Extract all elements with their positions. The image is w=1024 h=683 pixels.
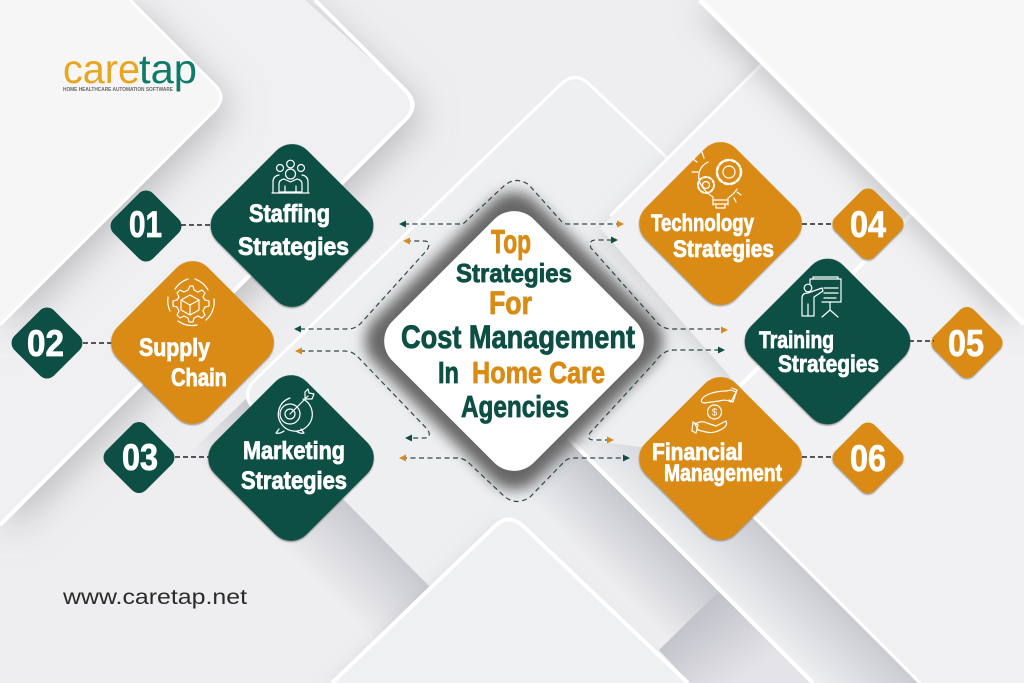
item 05: training strategies xyxy=(736,250,1007,433)
diamond shadow ring xyxy=(353,180,675,502)
number badge 04: 04 xyxy=(850,204,886,245)
number badge 03: 03 xyxy=(122,437,158,478)
item 03: marketing strategies xyxy=(99,366,383,550)
number badge 05 xyxy=(927,303,1007,382)
item 06: financial management: Management xyxy=(664,460,782,487)
logo: caretap: HOME HEALTHCARE AUTOMATION SOFTWARE xyxy=(63,87,174,93)
icon: gear with box xyxy=(168,279,214,326)
title text: Home Care xyxy=(472,355,605,390)
item 02: supply chain: Chain xyxy=(171,364,227,392)
label: Supply xyxy=(139,334,210,362)
financial diamond xyxy=(630,368,811,549)
item 04: technology strategies: Strategies xyxy=(673,236,774,263)
supply diamond xyxy=(102,252,283,433)
label: Staffing xyxy=(249,200,330,228)
marketing diamond xyxy=(199,366,383,550)
title text: Strategies xyxy=(456,258,572,288)
title text: For xyxy=(489,285,532,321)
number badge 01 xyxy=(106,186,186,266)
logo: caretap: tap xyxy=(139,46,197,92)
number badge 02: 02 xyxy=(27,323,64,364)
number badge 02 xyxy=(7,303,87,383)
technology diamond xyxy=(630,133,811,314)
title text xyxy=(401,223,635,424)
title text: Cost Management xyxy=(401,319,635,355)
item 02: supply chain xyxy=(7,252,283,433)
item 05: training strategies: Strategies xyxy=(778,351,879,378)
central diamond: title xyxy=(353,180,675,502)
item 04: technology strategies xyxy=(630,133,908,314)
icon: bulb with gears xyxy=(692,152,741,208)
label: Marketing xyxy=(243,437,345,465)
icon: target xyxy=(276,389,314,433)
icon: hands with coin xyxy=(692,388,737,433)
number badge 06: 06 xyxy=(850,438,886,479)
number badge 06 xyxy=(828,418,908,498)
item 06: financial management xyxy=(630,368,908,549)
title text: Agencies xyxy=(461,389,569,424)
number badge 03 xyxy=(99,418,179,497)
staffing diamond xyxy=(201,135,383,316)
label: Financial xyxy=(652,439,743,466)
number badge 05: 05 xyxy=(948,323,984,364)
logo: caretap xyxy=(63,46,197,93)
dashed connector arrows around centre xyxy=(294,180,728,502)
white diamond xyxy=(373,200,655,482)
training diamond xyxy=(736,250,919,433)
icon: people xyxy=(272,160,309,193)
title text: Top xyxy=(491,223,531,260)
item 01: staffing strategies: Strategies xyxy=(238,233,349,261)
item 01: staffing strategies xyxy=(106,135,383,316)
label: Training xyxy=(759,327,834,354)
icon: hands with coin: $ xyxy=(712,408,718,418)
icon: trainer at board xyxy=(802,277,841,317)
website url: www.caretap.net xyxy=(62,586,247,609)
number badge 01: 01 xyxy=(129,204,162,245)
label: Technology xyxy=(651,210,755,237)
item 03: marketing strategies: Strategies xyxy=(241,467,347,495)
number badge 04 xyxy=(828,184,908,264)
logo: caretap: care xyxy=(63,46,140,92)
title text: In xyxy=(438,355,459,390)
